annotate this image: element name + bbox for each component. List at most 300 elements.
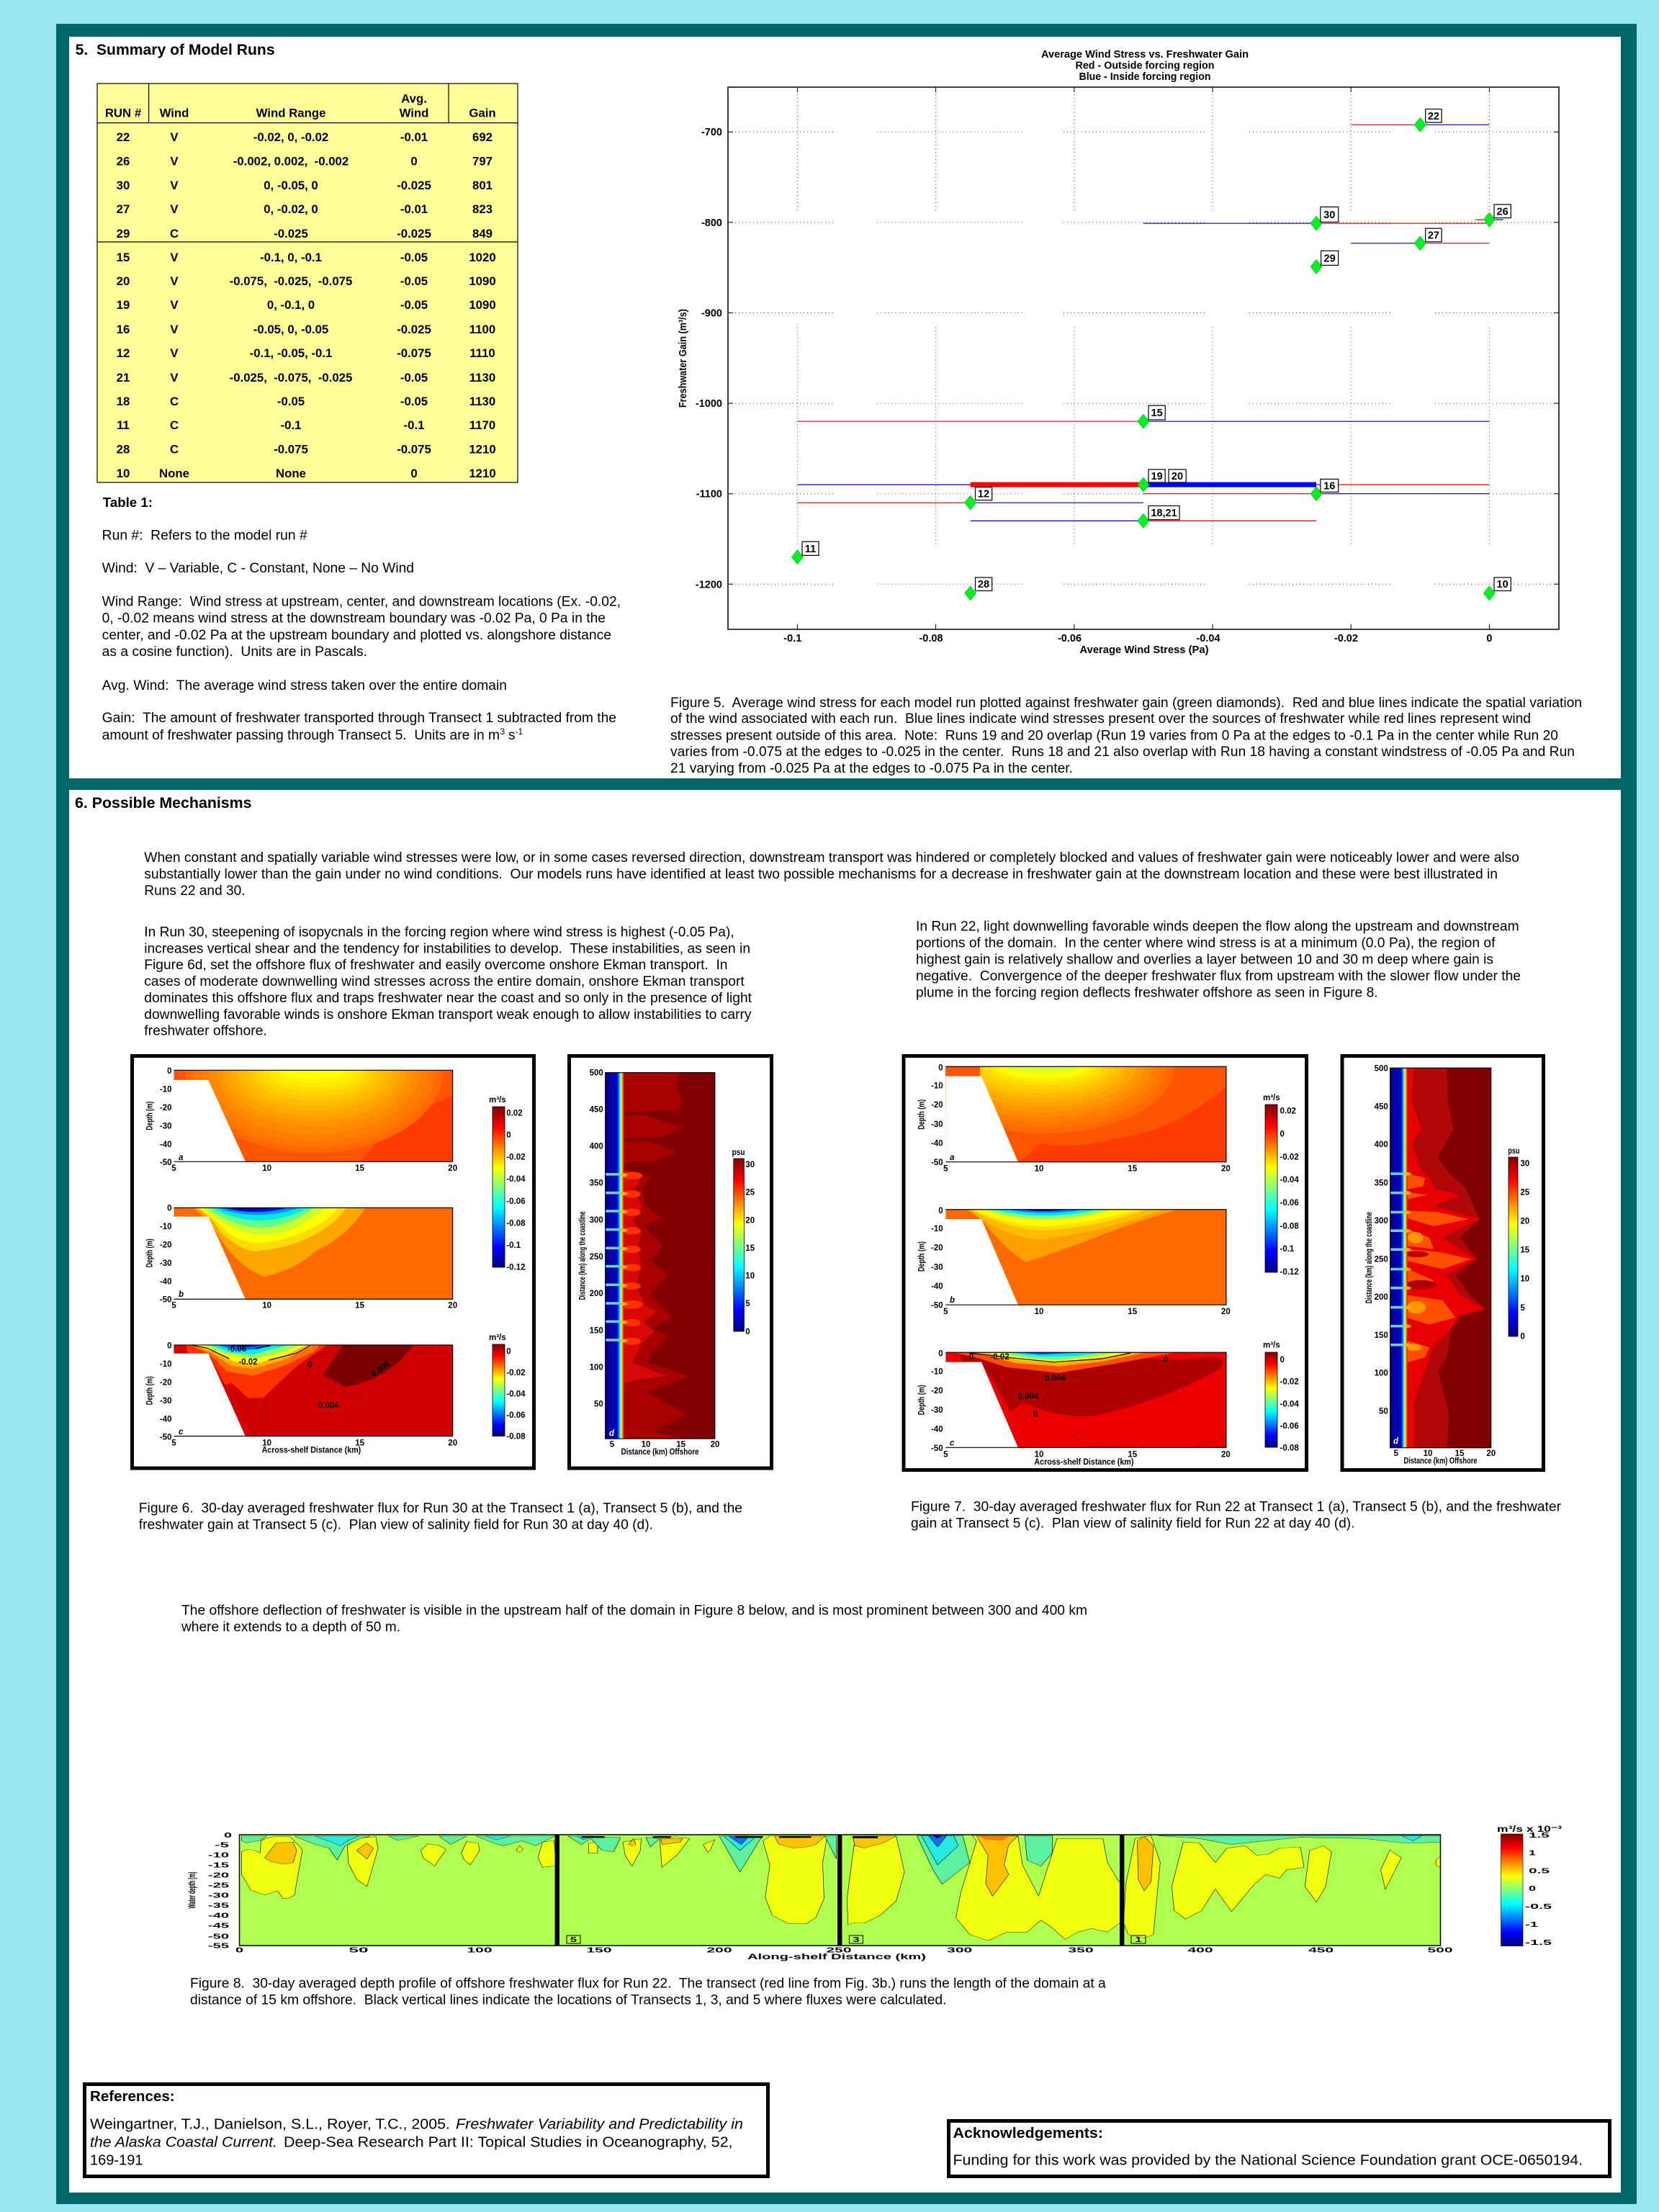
wind range lines <box>797 125 1503 521</box>
axis text: 450 <box>1308 1947 1334 1954</box>
table: model runs: -0.025 <box>397 179 431 192</box>
axis text: 300 <box>947 1947 973 1954</box>
run number tags <box>802 109 1511 590</box>
axis text: 50 <box>594 1400 603 1408</box>
table: model runs: 26 <box>117 154 130 168</box>
axis text: 0 <box>307 1361 313 1370</box>
axis text: 300 <box>590 1216 603 1225</box>
axis text: 10 <box>262 1164 271 1173</box>
colorbar <box>1497 1824 1562 1947</box>
colorbars: -0.1 <box>506 1241 521 1250</box>
colorbars: -0.06 <box>506 1197 526 1206</box>
table: model runs: 1130 <box>469 395 495 408</box>
text block: table 1 notes: Wind Range: Wind stress at upstream, center, and downstream locations (Ex. -0.02, <box>102 595 621 610</box>
colorbar: 5 <box>745 1300 750 1308</box>
colorbars: -0.12 <box>1280 1268 1299 1277</box>
run number tags: 16 <box>1323 481 1335 493</box>
run number tags: 11 <box>805 544 816 555</box>
text block: mechanisms intro: substantially lower than the gain under no wind conditions. Our models runs have identified at least two possible mechanisms for a decrease in freshwater gain at the downstream location and these were best illustrated in <box>144 867 1498 882</box>
panel: references: Freshwater Variability and Predictability in <box>456 2117 743 2133</box>
table: model runs: -0.025 <box>397 323 431 336</box>
run number tags: 18,21 <box>1151 508 1177 519</box>
axis text: 20 <box>711 1440 719 1449</box>
table: model runs: 0 <box>410 467 418 480</box>
table: model runs: V <box>170 179 179 192</box>
axis text: Depth (m) <box>917 1385 926 1415</box>
axis text: c <box>179 1428 184 1437</box>
axis text: -30 <box>931 1120 943 1129</box>
axis text: 15 <box>676 1440 686 1449</box>
colorbars: -0.08 <box>506 1433 526 1442</box>
colorbar: 0 <box>1520 1332 1525 1341</box>
colorbars: -0.06 <box>506 1411 526 1420</box>
table: model runs: 0, -0.1, 0 <box>267 298 315 312</box>
axis labels: -0.1 <box>783 633 801 644</box>
text block: table 1 notes: center, and -0.02 Pa at the upstream boundary and plotted vs. alongshore distance <box>102 628 611 643</box>
axis text: 0 <box>938 1349 943 1358</box>
figure 7d: salinity plan view run 22 <box>1342 1056 1544 1470</box>
text block: offshore deflection: where it extends to a depth of 50 m. <box>181 1620 400 1635</box>
axis text: 0 <box>969 1353 974 1362</box>
table: model runs: C <box>170 442 179 457</box>
table: model runs: Gain <box>469 107 496 120</box>
axis text: 0 <box>1033 1411 1038 1419</box>
axis labels: -700 <box>701 127 722 138</box>
table: model runs: -0.1 <box>281 418 301 432</box>
axis text: -50 <box>931 1159 943 1167</box>
text block: table 1 notes: amount of freshwater passing through Transect 5. Units are in m <box>102 728 500 743</box>
axis text: 150 <box>590 1326 603 1335</box>
table: model runs: -0.05 <box>400 251 428 264</box>
caption: figure 8: distance of 15 km offshore. Black vertical lines indicate the locations of Transects 1, 3, and 5 where fluxes were calculated. <box>190 1992 946 2008</box>
axis labels: -0.04 <box>1196 633 1220 644</box>
axis text: 10 <box>262 1302 271 1310</box>
panel: references <box>85 2084 768 2176</box>
axis text: Depth (m) <box>145 1238 154 1267</box>
colorbars: -0.06 <box>1280 1422 1299 1431</box>
caption: figure 7 <box>911 1500 1562 1531</box>
table: model runs: 1100 <box>469 323 495 336</box>
transect markers: 5 <box>570 1936 577 1944</box>
axis text: 400 <box>1188 1947 1213 1954</box>
run number tags: 26 <box>1497 206 1509 217</box>
axis text: 400 <box>590 1143 603 1151</box>
axis labels: Freshwater Gain (m³/s) <box>678 309 689 408</box>
axis text: 5 <box>171 1302 176 1310</box>
colorbars: 0.02 <box>1280 1107 1296 1116</box>
axis text: 5 <box>943 1308 948 1316</box>
axis text: 100 <box>1375 1370 1388 1378</box>
heading: section 5: 5. Summary of Model Runs <box>76 42 275 58</box>
axis text: 400 <box>1375 1141 1388 1149</box>
axis text: Across-shelf Distance (km) <box>262 1446 361 1455</box>
axis labels: Average Wind Stress (Pa) <box>1080 644 1209 656</box>
table: model runs: 21 <box>117 371 130 385</box>
table: model runs: 1170 <box>469 418 495 432</box>
axis text: 5 <box>943 1450 948 1459</box>
run number tags: 15 <box>1151 408 1163 419</box>
axis text: 0.004 <box>1045 1374 1066 1382</box>
axis text: 20 <box>448 1164 457 1173</box>
colorbar <box>732 1148 755 1336</box>
colorbar: 25 <box>1520 1189 1530 1197</box>
run number tags: 12 <box>978 488 989 500</box>
table: model runs: 1090 <box>469 298 496 312</box>
axis text: 0 <box>938 1207 943 1215</box>
caption: figure 5 <box>670 696 1582 776</box>
axis text: 20 <box>448 1439 457 1448</box>
text block: run 30 mechanism: downwelling favorable winds is onshore Ekman transport weak enough to allow instabilities to carry <box>144 1007 752 1022</box>
axis text: -0.06 <box>228 1345 246 1354</box>
axis labels: -1200 <box>696 579 722 590</box>
table: model runs: -0.1, 0, -0.1 <box>260 251 322 264</box>
panel: references: References: <box>90 2089 175 2105</box>
table: model runs: -0.075, -0.025, -0.075 <box>230 274 352 288</box>
contour shapes <box>174 1070 453 1436</box>
axis text: 0 <box>235 1947 244 1954</box>
text block: table 1 notes: 3 <box>500 727 505 737</box>
axis text: 350 <box>1069 1947 1094 1954</box>
table: model runs: 692 <box>472 130 493 144</box>
axis text: Distance (km) along the coastline <box>1365 1212 1374 1303</box>
axis text: -10 <box>160 1360 171 1369</box>
axis text <box>1365 1065 1496 1466</box>
colorbar: 0 <box>1529 1885 1537 1893</box>
axis text: -50 <box>931 1444 943 1453</box>
colorbar: -1 <box>1525 1921 1539 1929</box>
colorbars: 0.02 <box>506 1109 523 1118</box>
axis text: -50 <box>160 1296 171 1305</box>
axis text <box>186 1832 1453 1961</box>
table: model runs: -0.05 <box>400 298 428 312</box>
colorbars: -0.04 <box>506 1175 526 1184</box>
axis text: d <box>1393 1437 1399 1446</box>
table: model runs: 10 <box>117 467 130 480</box>
colorbars: 0 <box>506 1348 511 1357</box>
table: model runs: -0.01 <box>400 202 428 216</box>
colorbars: -0.06 <box>1280 1199 1299 1208</box>
run number tags: 29 <box>1324 253 1336 265</box>
axis text: 0 <box>167 1205 171 1213</box>
plot frame <box>239 1835 1440 1946</box>
axis text: Distance (km) along the coastline <box>579 1211 588 1300</box>
table: model runs: V <box>170 346 179 360</box>
colorbar: 20 <box>745 1216 755 1225</box>
axis text: 10 <box>1035 1308 1043 1316</box>
axis text: 0 <box>167 1342 171 1351</box>
table: model runs: -0.002, 0.002, -0.002 <box>233 154 349 168</box>
colorbars: 0 <box>506 1131 511 1140</box>
axis text: 20 <box>1221 1165 1231 1174</box>
colorbars: -0.1 <box>1280 1245 1295 1254</box>
text block: run 30 mechanism: freshwater offshore. <box>144 1024 267 1039</box>
axis text: 100 <box>467 1947 493 1954</box>
colorbar: psu <box>732 1148 745 1157</box>
table: model runs: -0.075 <box>397 442 431 457</box>
table: model runs: C <box>170 395 179 408</box>
table: model runs: 823 <box>472 202 493 216</box>
axis text: 450 <box>590 1106 603 1115</box>
table: model runs: V <box>170 251 179 264</box>
colorbar: 10 <box>745 1272 755 1280</box>
caption: figure 6: Figure 6. 30-day averaged freshwater flux for Run 30 at the Transect 1 (a), Transect 5 (b), and the <box>139 1501 742 1516</box>
colorbar: psu <box>1508 1147 1519 1156</box>
caption: figure 7: Figure 7. 30-day averaged freshwater flux for Run 22 at Transect 1 (a), Transect 5 (b), and the freshwater <box>911 1500 1562 1515</box>
table: model runs: 16 <box>117 323 130 336</box>
axis text <box>579 1069 719 1457</box>
colorbars: -0.04 <box>506 1390 526 1399</box>
table: model runs: 0, -0.02, 0 <box>264 202 318 216</box>
axis text: 20 <box>1221 1308 1231 1316</box>
axis text: 15 <box>355 1164 365 1173</box>
axis text: c <box>950 1439 955 1447</box>
colorbar: 1 <box>1529 1849 1537 1858</box>
axis text: 5 <box>610 1440 615 1449</box>
axis text: 250 <box>590 1253 603 1262</box>
text block: table 1 notes: 0, -0.02 means wind stress at the downstream boundary was -0.02 Pa, 0 Pa in the <box>102 611 606 626</box>
axis text: 20 <box>448 1302 457 1310</box>
text block: mechanisms intro: When constant and spatially variable wind stresses were low, or in some cases reversed direction, downstream transport was hindered or completely blocked and values of freshwater gain were noticeably lower and were also <box>144 850 1519 866</box>
axis text: -10 <box>931 1082 943 1091</box>
table: model runs: 0 <box>410 154 418 168</box>
axis text: 0 <box>1164 1356 1168 1364</box>
axis text: 500 <box>1375 1065 1388 1074</box>
table: model runs: C <box>170 227 179 240</box>
colorbar: 5 <box>1520 1304 1525 1313</box>
text block: offshore deflection <box>181 1604 1087 1635</box>
table: model runs: 20 <box>117 274 130 288</box>
axis labels: -0.06 <box>1058 633 1082 644</box>
axis text: -50 <box>160 1159 171 1167</box>
table: model runs: 797 <box>472 154 493 168</box>
axis labels <box>678 127 1492 656</box>
axis text: 200 <box>590 1290 603 1298</box>
axis text: 0.006 <box>370 1359 392 1379</box>
colorbar: 30 <box>745 1161 755 1169</box>
colorbar: 0 <box>745 1328 750 1336</box>
axis text: d <box>609 1429 615 1438</box>
table: model runs: -0.025 <box>397 227 431 240</box>
panel: acknowledgements: Acknowledgements: <box>953 2126 1103 2141</box>
table: model runs: 12 <box>117 346 130 360</box>
table: model runs: -0.025, -0.075, -0.025 <box>230 371 352 385</box>
table: model runs: Wind Range <box>256 107 325 120</box>
axis text: -40 <box>931 1426 943 1434</box>
colorbars: -0.02 <box>506 1369 526 1377</box>
salinity field <box>606 1073 715 1439</box>
axis text: 500 <box>590 1069 603 1077</box>
axis text: 15 <box>1455 1449 1465 1458</box>
caption: figure 8 <box>190 1977 1106 2008</box>
axis text: 500 <box>1427 1947 1453 1954</box>
run number tags: 22 <box>1428 111 1439 122</box>
table: model runs: 27 <box>117 202 130 216</box>
colorbar: 20 <box>1520 1217 1529 1226</box>
table: model runs: RUN # <box>105 107 142 120</box>
panel: acknowledgements <box>949 2121 1610 2176</box>
table: model runs: 1210 <box>469 442 496 457</box>
chart title: Red - Outside forcing region <box>1076 60 1214 72</box>
contours right half <box>847 1835 1440 1941</box>
axis labels: -1000 <box>696 398 722 410</box>
axis text: -30 <box>160 1397 171 1406</box>
run number tags: 19 <box>1151 471 1163 482</box>
axis text: -30 <box>160 1122 171 1130</box>
text block: table 1 notes: Gain: The amount of freshwater transported through Transect 1 subtracted from the <box>102 711 616 726</box>
axis text: Across-shelf Distance (km) <box>1034 1458 1134 1467</box>
table: model runs: 22 <box>117 130 130 144</box>
axis text: -10 <box>931 1225 943 1233</box>
colorbar: m³/s x 10⁻³ <box>1497 1824 1562 1834</box>
table: model runs: -0.05 <box>400 371 428 385</box>
run number tags: 28 <box>978 579 989 590</box>
caption: figure 5: of the wind associated with each run. Blue lines indicate wind stresses present over the sources of freshwater while red lines represent wind <box>670 711 1531 727</box>
axis text: 200 <box>707 1947 732 1954</box>
colorbar <box>1508 1147 1530 1341</box>
table: model runs: 28 <box>117 442 130 457</box>
colorbars: -0.02 <box>1280 1154 1299 1162</box>
axis text: Water depth (m) <box>186 1872 197 1908</box>
colorbars: -0.02 <box>506 1154 526 1162</box>
axis text: -20 <box>931 1101 943 1110</box>
colorbars: -0.04 <box>1280 1176 1299 1184</box>
text block: mechanisms intro: Runs 22 and 30. <box>144 884 246 899</box>
axis labels: -0.08 <box>919 633 943 644</box>
caption: figure 6: freshwater gain at Transect 5 (c). Plan view of salinity field for Run 30 at day 40 (d). <box>139 1517 653 1532</box>
axis text: 250 <box>1375 1256 1388 1264</box>
table: model runs: None <box>159 467 189 480</box>
axis text: 10 <box>1035 1450 1043 1459</box>
table: model runs: V <box>170 202 179 216</box>
axis text: Depth (m) <box>917 1100 926 1130</box>
axis text: -40 <box>931 1282 943 1291</box>
table: model runs: V <box>170 154 179 168</box>
axis text: -40 <box>160 1416 171 1424</box>
table: model runs: -0.05, 0, -0.05 <box>253 323 328 336</box>
chart title: Average Wind Stress vs. Freshwater Gain <box>1041 49 1249 60</box>
text block: table 1 notes: as a cosine function). Units are in Pascals. <box>102 644 367 660</box>
colorbars: -0.02 <box>1280 1378 1299 1387</box>
axis text: 15 <box>1128 1165 1138 1174</box>
chart title <box>1041 49 1249 83</box>
colorbar: 0.5 <box>1529 1868 1550 1875</box>
figure 6d: salinity plan view run 30 <box>569 1056 772 1468</box>
panel: acknowledgements: Funding for this work was provided by the National Science Foundation grant OCE-0650194. <box>953 2153 1583 2169</box>
colorbars <box>1263 1094 1299 1453</box>
axis text: -20 <box>931 1387 943 1395</box>
table: model runs: -0.05 <box>400 274 428 288</box>
run number tags: 27 <box>1428 230 1439 242</box>
axis text: Depth (m) <box>145 1376 154 1405</box>
table: model runs: -0.1 <box>404 418 424 432</box>
table: model runs: 11 <box>117 418 130 432</box>
axis text: -10 <box>208 1852 230 1860</box>
contour shapes <box>912 1066 1226 1447</box>
caption: figure 5: varies from -0.075 at the edges to -0.025 in the center. Runs 18 and 21 also overlap with Run 18 having a constant windstress of -0.05 Pa and Run <box>670 745 1575 760</box>
axis text: -0.02 <box>238 1358 258 1367</box>
colorbars: 0 <box>1280 1356 1285 1364</box>
text block: run 22 mechanism: In Run 22, light downwelling favorable winds deepen the flow along the upstream and downstream <box>916 920 1519 935</box>
chart: figure 8 depth profile <box>186 1824 1562 1961</box>
axis text: -30 <box>208 1892 230 1899</box>
transect markers <box>555 1835 1146 1946</box>
text block: table 1 notes: s <box>508 728 516 743</box>
colorbar: -0.5 <box>1525 1903 1552 1911</box>
axis text: 5 <box>943 1165 948 1174</box>
axis labels: -900 <box>701 308 722 320</box>
colorbar: 25 <box>745 1189 755 1197</box>
axis text: Distance (km) Offshore <box>621 1448 698 1457</box>
axis text: 350 <box>590 1179 603 1188</box>
table: model runs: V <box>170 274 179 288</box>
axis text: -5 <box>215 1842 230 1850</box>
axis text: -10 <box>931 1368 943 1377</box>
table: model runs: -0.1, -0.05, -0.1 <box>250 346 332 360</box>
axis text: 300 <box>1375 1217 1388 1226</box>
axis text: 350 <box>1375 1179 1388 1188</box>
run number tags: 30 <box>1323 210 1335 221</box>
text block: offshore deflection: The offshore deflection of freshwater is visible in the upstream half of the domain in Figure 8 below, and is most prominent between 300 and 400 km <box>181 1604 1087 1619</box>
heading: section 6: 6. Possible Mechanisms <box>75 795 252 811</box>
axis text: -35 <box>208 1902 230 1910</box>
table: model runs: V <box>170 130 179 144</box>
panel: references: the Alaska Coastal Current. <box>90 2135 277 2151</box>
colorbars <box>489 1096 526 1442</box>
axis text: 250 <box>827 1947 852 1954</box>
axis text: -20 <box>208 1871 230 1879</box>
colorbars: -0.04 <box>1280 1400 1299 1408</box>
axis text: 0.004 <box>1018 1393 1039 1401</box>
text block: table 1 notes: Run #: Refers to the model run # <box>102 529 307 544</box>
table: model runs: V <box>170 323 179 336</box>
chart: figure 5 wind stress vs freshwater gain <box>678 49 1559 656</box>
axis text: Along-shelf Distance (km) <box>747 1953 927 1961</box>
chart title: Blue - Inside forcing region <box>1079 71 1211 83</box>
caption: figure 7: gain at Transect 5 (c). Plan view of salinity field for Run 22 at day 40 (d). <box>911 1516 1355 1531</box>
axis text: -50 <box>931 1302 943 1310</box>
table: model runs: 0, -0.05, 0 <box>264 179 318 192</box>
run number tags: 20 <box>1172 471 1183 482</box>
axis text: 450 <box>1375 1103 1388 1112</box>
axis text: 10 <box>642 1440 650 1449</box>
axis text: 10 <box>262 1439 271 1448</box>
transect markers: 1 <box>1135 1936 1142 1944</box>
axis text: Depth (m) <box>917 1241 926 1272</box>
axis text: -50 <box>160 1434 171 1442</box>
plot axes <box>728 87 1559 629</box>
colorbars: 0 <box>1280 1130 1285 1139</box>
panel: references: Deep-Sea Research Part II: Topical Studies in Oceanography, 52, <box>284 2135 733 2151</box>
text block: run 22 mechanism: portions of the domain. In the center where wind stress is at a minimum (0.0 Pa), the region of <box>916 935 1496 950</box>
axis text: -40 <box>931 1140 943 1148</box>
text block: table 1 notes <box>102 495 621 743</box>
axis labels: 0 <box>1486 633 1492 644</box>
table: model runs: -0.025 <box>274 227 308 240</box>
table: model runs: 18 <box>117 395 130 408</box>
axis text: -20 <box>160 1379 171 1388</box>
table: model runs: -0.075 <box>397 346 431 360</box>
axis text: 5 <box>171 1164 176 1173</box>
text block: run 30 mechanism: cases of moderate downwelling wind stresses across the entire domain, onshore Ekman transport <box>144 974 745 989</box>
table: model runs: C <box>170 418 179 432</box>
axis text: 15 <box>1128 1308 1138 1316</box>
axis text: -55 <box>208 1943 230 1951</box>
table: model runs <box>97 84 518 482</box>
axis text: 0.004 <box>318 1401 339 1410</box>
colorbars: m³/s <box>489 1334 506 1342</box>
colorbars: -0.12 <box>506 1264 526 1272</box>
table: model runs: 15 <box>117 251 130 264</box>
